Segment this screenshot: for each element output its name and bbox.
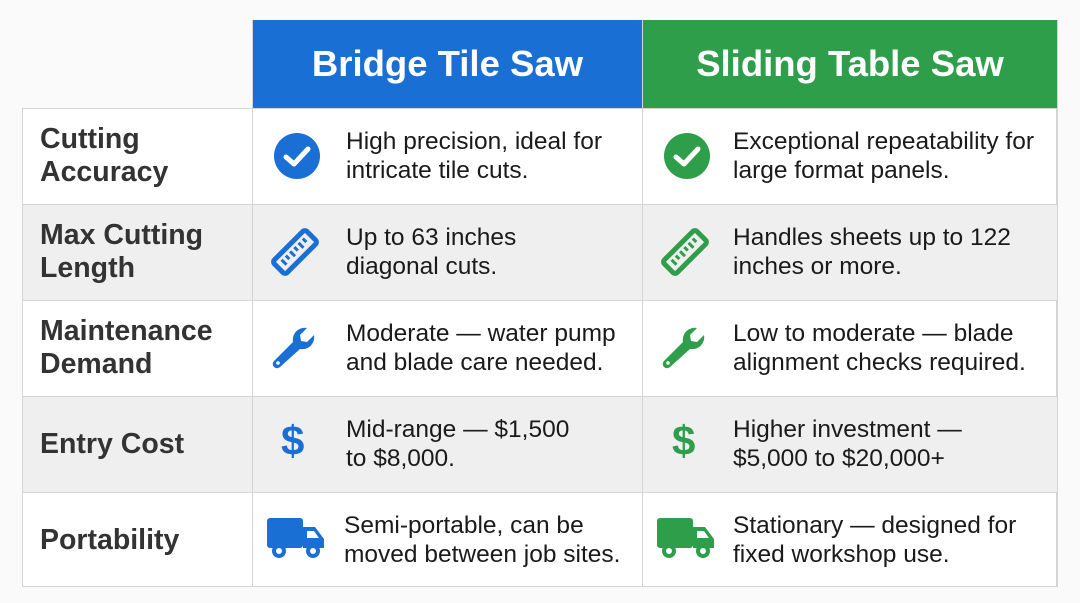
text: bridge accuracy: intricate tile cuts. [346,157,528,184]
text: sliding portability [733,512,1016,568]
label: Entry Cost: Entry Cost [40,428,184,460]
header: Sliding Table Saw: Sliding Table Saw [696,43,1004,84]
icon: green wrench [662,328,704,368]
icon: green ruler [661,228,709,276]
text: sliding accuracy: Exceptional repeatability for [733,128,1034,155]
text: sliding maintenance: alignment checks required. [733,349,1026,376]
text: sliding cost: $5,000 to $20,000+ [733,445,945,472]
icon: green truck [657,518,714,558]
label: Max Cutting Length [40,219,203,284]
label: Maintenance Demand [40,315,213,380]
text: bridge length: Up to 63 inches [346,224,516,251]
icon: blue dollar: $ [281,417,304,464]
icon: blue ruler [271,228,319,276]
table background [22,108,1057,587]
text: sliding length [733,224,1011,280]
text: bridge accuracy [346,128,602,184]
label: Maintenance Demand: Demand [40,348,152,380]
label: Portability: Portability [40,524,179,556]
text: bridge length [346,224,516,280]
text: sliding portability: fixed workshop use. [733,541,950,568]
text: bridge length: diagonal cuts. [346,253,497,280]
text: sliding cost [733,416,962,472]
label: Cutting Accuracy [40,123,168,188]
label: Max Cutting Length: Length [40,252,135,284]
header: Bridge Tile Saw [253,20,642,108]
text: sliding maintenance [733,320,1026,376]
text: bridge maintenance: and blade care needed. [346,349,603,376]
label: Cutting Accuracy: Cutting [40,123,140,155]
text: bridge portability [344,512,620,568]
label: Maintenance Demand: Maintenance [40,315,213,347]
text: bridge maintenance: Moderate — water pump [346,320,616,347]
text: sliding accuracy: large format panels. [733,157,950,184]
text: bridge portability: moved between job sites. [344,541,620,568]
icon: green dollar: $ [672,417,695,464]
icon: blue check [274,133,320,179]
header: Sliding Table Saw [643,20,1057,108]
label: Max Cutting Length: Max Cutting [40,219,203,251]
icon: blue truck [267,518,324,558]
label: Cutting Accuracy: Accuracy [40,156,168,188]
text: bridge cost: Mid-range — $1,500 [346,416,569,443]
text: bridge accuracy: High precision, ideal for [346,128,602,155]
text: sliding cost: Higher investment — [733,416,962,443]
header: Bridge Tile Saw: Bridge Tile Saw [312,43,583,84]
text: sliding length: inches or more. [733,253,902,280]
text: sliding accuracy [733,128,1034,184]
icon: green check [664,133,710,179]
row shading [23,205,1057,300]
text: bridge cost: to $8,000. [346,445,455,472]
text: sliding portability: Stationary — designed for [733,512,1016,539]
text: bridge cost [346,416,569,472]
icon: blue wrench [272,328,314,368]
text: bridge portability: Semi-portable, can be [344,512,584,539]
text: bridge maintenance [346,320,616,376]
text: sliding maintenance: Low to moderate — blade [733,320,1014,347]
text: sliding length: Handles sheets up to 122 [733,224,1011,251]
